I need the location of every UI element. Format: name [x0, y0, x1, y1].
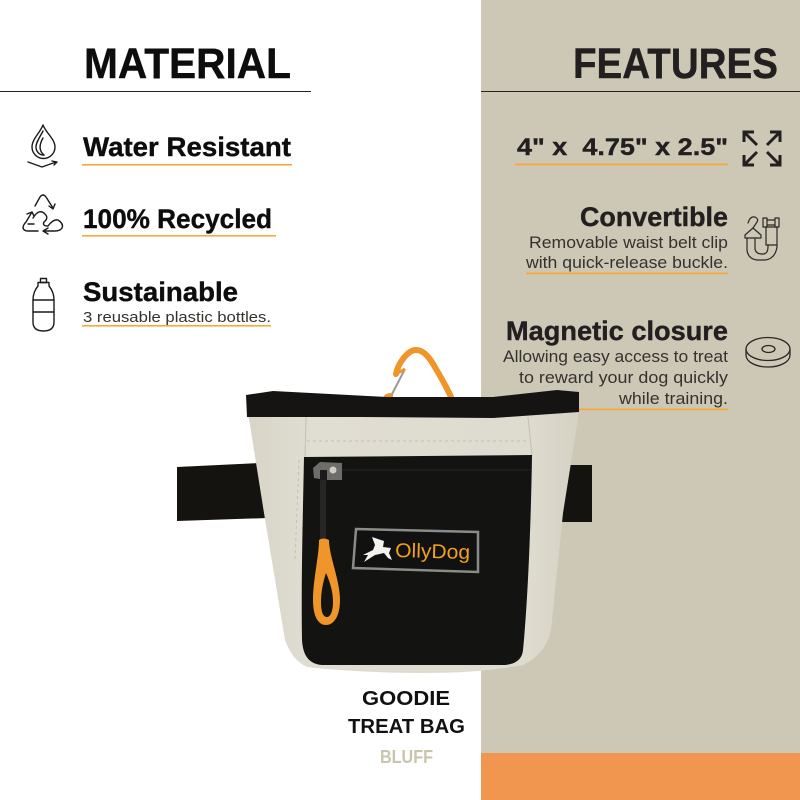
footer: orange band: [481, 753, 800, 800]
text: convertible: Convertible: [580, 202, 728, 232]
panel: features background: [481, 0, 800, 753]
top band: [246, 390, 579, 418]
logo patch: OllyDog: [395, 540, 470, 564]
product name: BLUFF: [380, 747, 433, 767]
text: magnetic closure: to reward your dog quickly: [519, 369, 729, 387]
stitching: [295, 417, 532, 560]
belt right: [560, 465, 592, 522]
text: magnetic closure: while training.: [618, 390, 728, 408]
zipper line: [342, 469, 530, 471]
logo patch: [353, 529, 478, 572]
panel: material list: [23, 125, 292, 331]
icon: magnet disc: [746, 338, 790, 367]
icon: water drop: [28, 125, 57, 167]
text: convertible: Removable waist belt clip: [529, 234, 728, 252]
text: water resistant: Water Resistant: [83, 132, 291, 162]
text: 100% recycled: 100% Recycled: [83, 204, 272, 234]
carabiner: [387, 350, 451, 397]
heading: material: MATERIAL: [84, 40, 291, 88]
front pocket: [302, 455, 532, 665]
text: sustainable: 3 reusable plastic bottles.: [83, 309, 271, 326]
product photo: treat bag: [177, 350, 592, 673]
bag body: [247, 410, 579, 673]
belt left: [177, 463, 268, 521]
text: magnetic closure: Allowing easy access to treat: [503, 348, 728, 366]
text: convertible: with quick-release buckle.: [525, 254, 728, 272]
zipper pull: [313, 462, 342, 625]
product name: GOODIE: [362, 688, 450, 710]
text: dimensions: 4" x 4.75" x 2.5": [517, 134, 728, 161]
icon: expand arrows: [744, 132, 780, 165]
text: sustainable: [82, 277, 271, 327]
text: convertible: [525, 202, 728, 274]
text: magnetic closure: Magnetic closure: [506, 316, 728, 346]
icon: bottle: [33, 278, 54, 331]
text: magnetic closure: [503, 316, 729, 410]
text: sustainable: Sustainable: [83, 277, 238, 307]
product name: TREAT BAG: [348, 716, 465, 738]
icon: waist belt clip: [745, 217, 779, 260]
heading: features: FEATURES: [573, 40, 778, 88]
panel: features list: [503, 132, 790, 410]
product name: [348, 688, 465, 767]
icon: recycle: [23, 195, 62, 234]
